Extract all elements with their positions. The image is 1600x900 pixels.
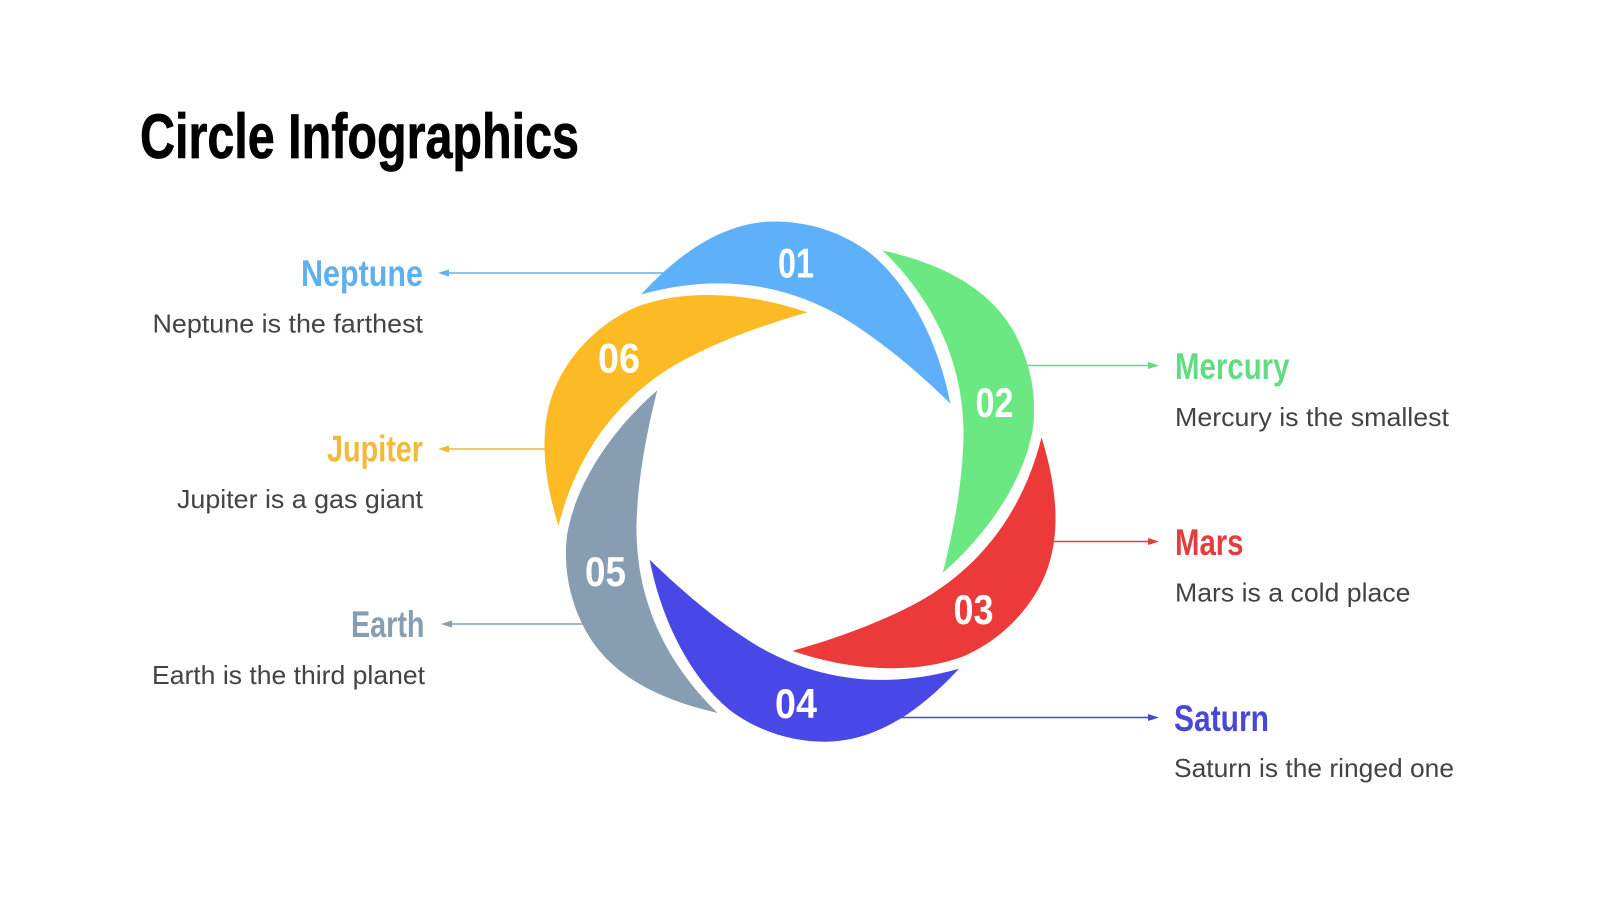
label: Neptune: Neptune (301, 253, 423, 294)
arrow: Mars (1040, 538, 1159, 545)
label: Earth: Earth is the third planet (152, 660, 426, 690)
blade 05 slate (500, 390, 812, 749)
label: Jupiter: Jupiter (327, 428, 423, 470)
blade 06 amber (495, 221, 808, 580)
blade 04 indigo (650, 560, 959, 742)
blade 01 blue (641, 222, 950, 404)
circular diagram (495, 214, 1105, 749)
label: Earth: Earth (351, 604, 424, 645)
label: Saturn: Saturn is the ringed one (1174, 753, 1454, 783)
title: Circle Infographics (140, 102, 579, 172)
label: Mercury: Mercury (1175, 346, 1290, 387)
blade 03 red (792, 383, 1105, 742)
label: Mercury (1175, 346, 1450, 432)
label: Saturn: Saturn (1174, 698, 1269, 739)
number 04: 04 (775, 680, 818, 727)
label: Mars (1175, 522, 1410, 608)
label: Neptune (152, 253, 424, 338)
label: Mars: Mars (1175, 522, 1244, 563)
arrow: Earth (441, 620, 590, 628)
label: Mercury: Mercury is the smallest (1175, 402, 1450, 432)
number 02: 02 (976, 379, 1014, 426)
arrow: Saturn (880, 714, 1159, 721)
number 05: 05 (585, 548, 626, 595)
label: Jupiter: Jupiter is a gas giant (177, 484, 424, 514)
arrow: Mercury (1020, 362, 1159, 369)
label: Neptune: Neptune is the farthest (152, 308, 424, 338)
arrow: Neptune (438, 270, 680, 276)
label: Saturn (1174, 698, 1454, 783)
blade 02 green (788, 214, 1100, 573)
label: Jupiter (177, 428, 424, 514)
label: Earth (152, 604, 426, 690)
number 03: 03 (954, 586, 994, 633)
arrow: Jupiter (438, 446, 552, 452)
number 06: 06 (598, 334, 640, 382)
label: Mars: Mars is a cold place (1175, 578, 1410, 608)
number 01: 01 (778, 240, 814, 286)
